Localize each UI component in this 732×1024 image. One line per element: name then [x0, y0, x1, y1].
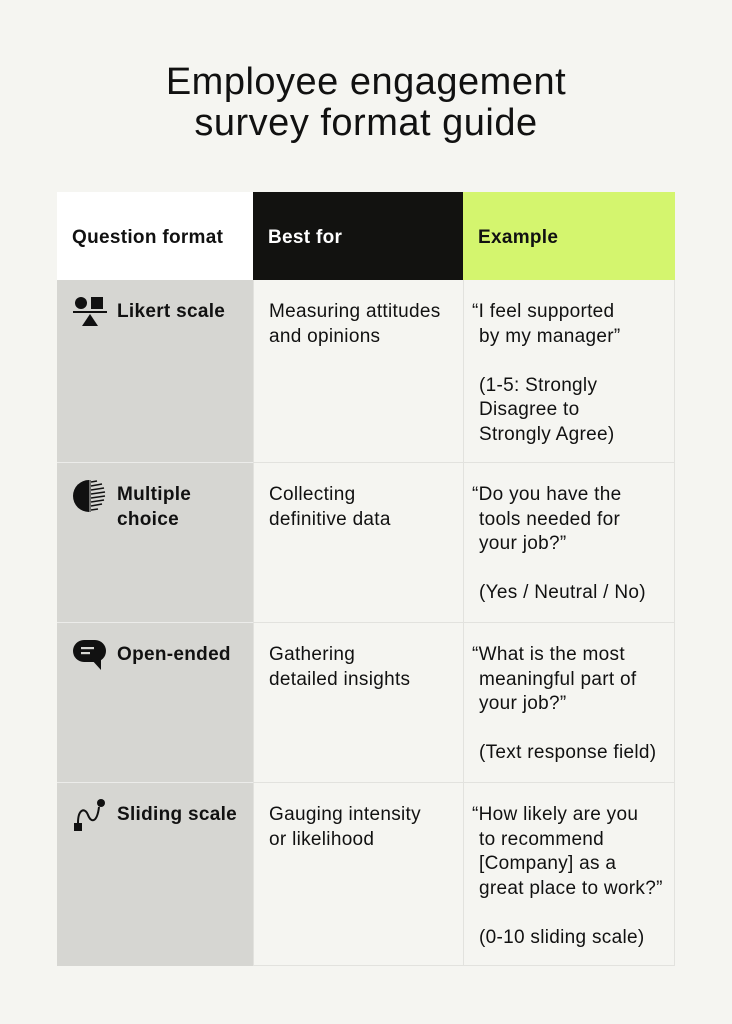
row: multiple choice best for [253, 463, 463, 623]
title [166, 61, 566, 144]
row: multiple choice best for: Collecting [269, 484, 355, 505]
row: sliding scale example: [Company] as a [479, 853, 616, 874]
icon: likert [73, 297, 107, 326]
row: likert best for: Measuring attitudes [269, 301, 441, 322]
row: open-ended best for: detailed insights [269, 668, 410, 690]
row: sliding scale example: (0-10 sliding scale) [479, 926, 644, 948]
row: sliding scale best for: Gauging intensity [269, 804, 421, 825]
row: multiple choice best for: definitive data [269, 508, 391, 530]
row: likert example: by my manager” [479, 326, 620, 346]
row: sliding scale label: Sliding scale [117, 804, 237, 825]
header: example: Example [478, 227, 558, 248]
row: open-ended example: “What is the most [472, 644, 625, 665]
row: likert example: “I feel supported [472, 301, 614, 322]
row: likert example: Disagree to [479, 399, 579, 420]
table [57, 192, 675, 966]
title: survey format guide [194, 102, 538, 144]
header: best for: Best for [268, 227, 342, 248]
row: open-ended example: your job?” [479, 693, 566, 714]
row: sliding scale label [57, 783, 253, 966]
row: sliding scale example: “How likely are you [472, 804, 638, 825]
row: open-ended example: meaningful part of [479, 668, 636, 690]
icon: speech bubble [73, 640, 106, 670]
row: multiple choice example: (Yes / Neutral / No) [479, 582, 646, 603]
row: likert example [463, 280, 675, 463]
row: likert example: Strongly Agree) [479, 424, 614, 444]
row: open-ended example: (Text response field) [479, 742, 656, 763]
row: multiple choice example: “Do you have the [472, 484, 622, 505]
row: open-ended label [57, 623, 253, 783]
header: question format: Question format [72, 227, 223, 248]
row: open-ended example [463, 623, 675, 783]
row: multiple choice example: your job?” [479, 533, 566, 554]
row: likert best for: and opinions [269, 326, 380, 346]
row: likert label [57, 280, 253, 463]
row: sliding scale best for [253, 783, 463, 966]
row: multiple choice label [57, 463, 253, 623]
icon: sliding scale [74, 799, 105, 831]
row: multiple choice label: Multiple [117, 484, 191, 505]
row: open-ended best for [253, 623, 463, 783]
row: open-ended best for: Gathering [269, 644, 355, 665]
title: Employee engagement [166, 61, 566, 103]
header: example [463, 192, 675, 280]
row: sliding scale example [463, 783, 675, 966]
row: likert best for [253, 280, 463, 463]
icon: half circle [73, 480, 106, 512]
row: multiple choice example: tools needed for [479, 508, 620, 530]
row: multiple choice label: choice [117, 508, 179, 530]
header: question format [57, 192, 253, 280]
row: open-ended label: Open-ended [117, 644, 231, 665]
row: likert example: (1-5: Strongly [479, 374, 597, 396]
row: sliding scale example: to recommend [479, 828, 604, 850]
header: best for [253, 192, 463, 280]
row: sliding scale example: great place to work?” [479, 878, 663, 898]
row: sliding scale best for: or likelihood [269, 828, 374, 850]
row: likert label: Likert scale [117, 301, 225, 322]
row: multiple choice example [463, 463, 675, 623]
